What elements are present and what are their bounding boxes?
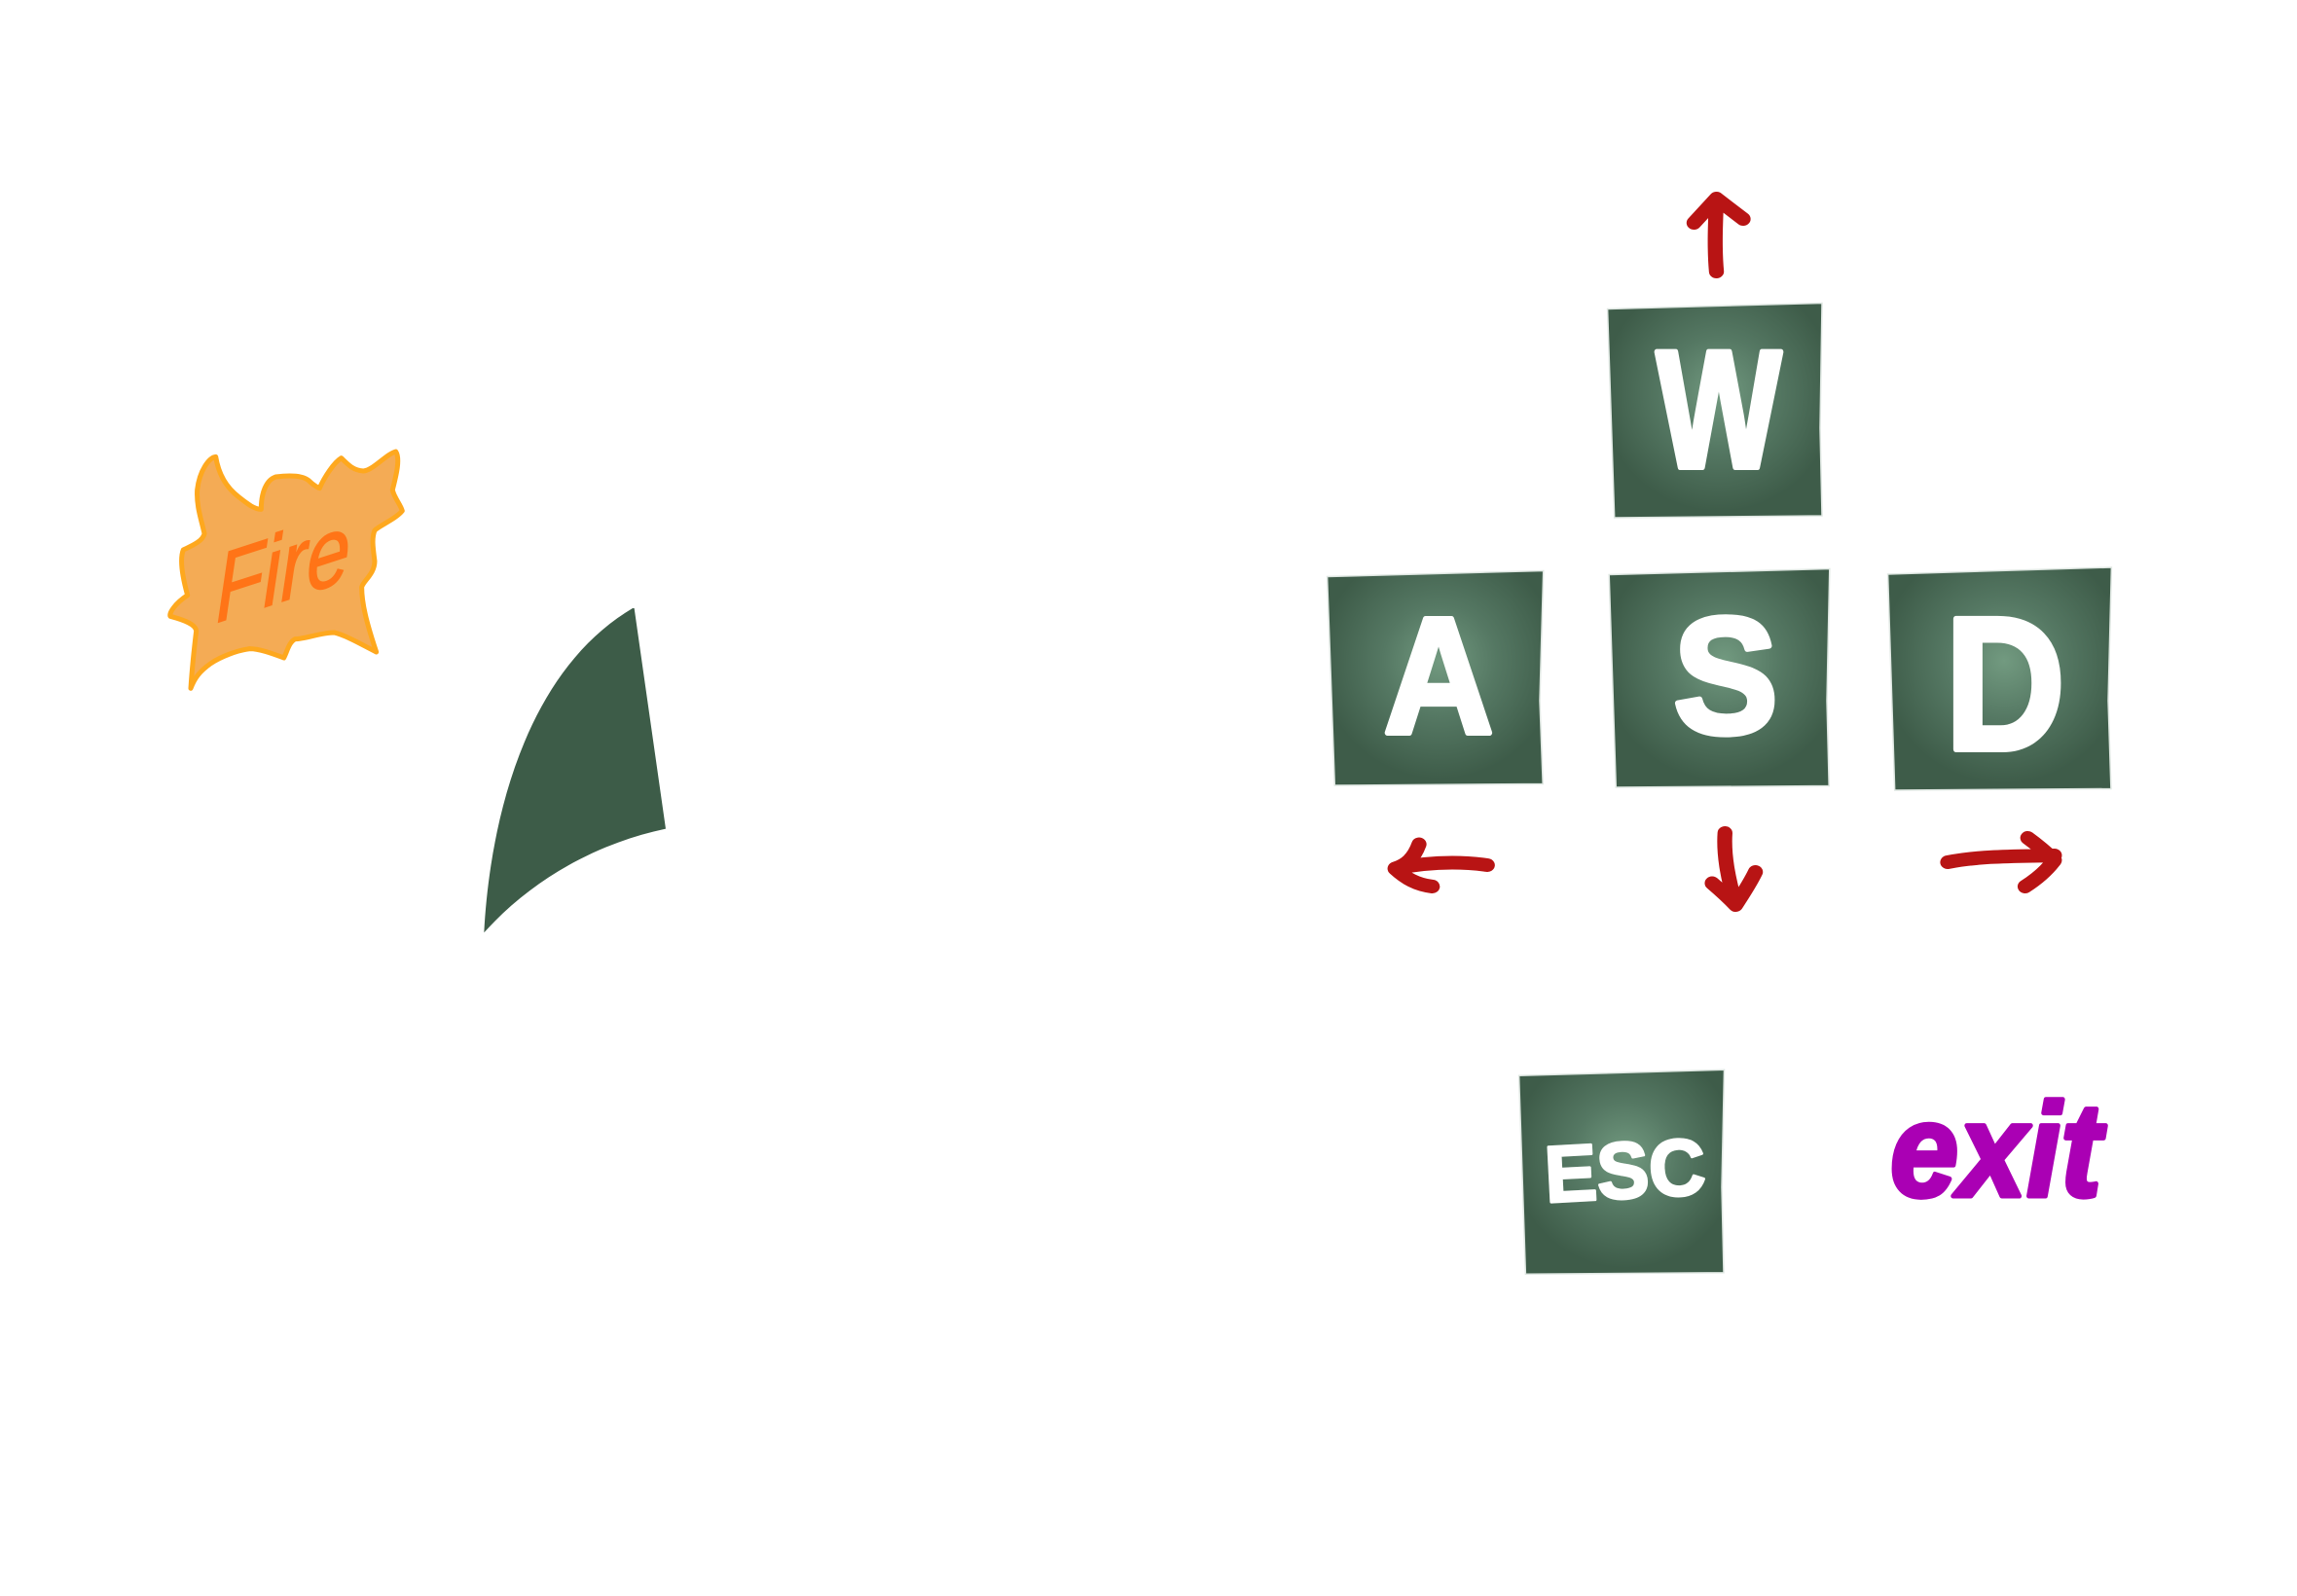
arrow up [1694, 199, 1743, 272]
key: A with left arrow [1328, 570, 1544, 887]
arrow left [1395, 845, 1487, 887]
key W: W [1657, 316, 1782, 503]
label: Fire: Fire [216, 490, 350, 644]
arrow down [1712, 833, 1756, 905]
key S [1609, 568, 1830, 787]
icon: fire burst with label [170, 452, 402, 688]
key A [1328, 570, 1544, 785]
key A: A [1384, 583, 1493, 768]
label: exit: exit [1890, 1075, 2106, 1224]
arrow right [1948, 838, 2055, 887]
key: S with down arrow [1609, 568, 1830, 905]
key: ESC: ESC [1543, 1123, 1707, 1220]
key: W with up arrow [1608, 199, 1822, 518]
key: ESC [1519, 1070, 1725, 1274]
key S: S [1673, 584, 1778, 769]
key D [1888, 567, 2111, 790]
fire burst shape [170, 452, 402, 688]
key W [1608, 304, 1822, 518]
key: D with right arrow [1888, 567, 2111, 887]
green wedge shape [484, 608, 666, 932]
key D: D [1945, 578, 2065, 789]
